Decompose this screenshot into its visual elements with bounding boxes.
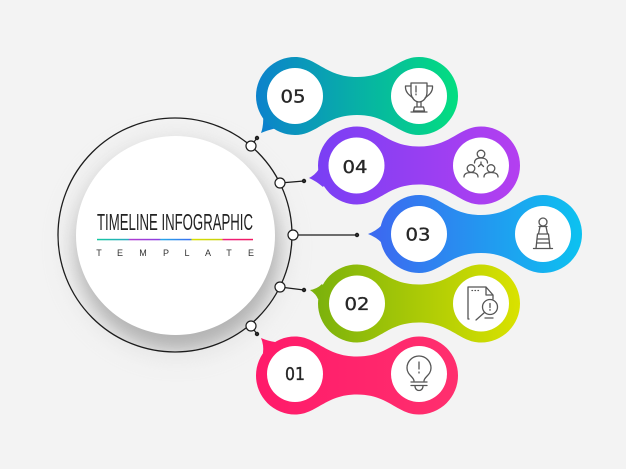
rainbow divider: [97, 239, 253, 240]
icon: light bulb: [407, 356, 431, 390]
icon: document with magnifier: [468, 287, 498, 320]
number 05: 05: [280, 86, 306, 108]
connector 05: [246, 136, 259, 151]
subtitle: E: [117, 248, 123, 258]
subtitle: P: [163, 248, 169, 258]
title block: [96, 209, 254, 258]
icon: trophy: [405, 83, 433, 112]
subtitle: A: [205, 248, 211, 258]
subtitle: [96, 248, 254, 258]
connector 04: [275, 178, 306, 188]
inner shadow of white disc: [78, 150, 278, 350]
pill 01: [256, 336, 458, 414]
icon: team: [464, 150, 498, 177]
white disc: [76, 136, 275, 335]
ring outline: [58, 118, 292, 352]
number 04: 04: [342, 157, 368, 178]
subtitle: T: [226, 248, 232, 258]
connector 01: [246, 321, 259, 336]
subtitle: M: [139, 248, 147, 258]
connectors: [246, 136, 359, 336]
pill 03: [368, 195, 582, 273]
connector 02: [275, 282, 306, 292]
title: TIMELINE INFOGRAPHIC: [97, 209, 253, 235]
outer disc shadow: [65, 134, 289, 358]
pill 04: [309, 126, 520, 204]
connector 03: [288, 230, 359, 240]
main circle: [58, 118, 292, 358]
icon: chess pawn: [534, 218, 552, 248]
subtitle: L: [184, 248, 190, 258]
subtitle: E: [248, 248, 254, 258]
pill 02: [310, 264, 520, 342]
subtitle: T: [96, 248, 102, 258]
infographic canvas: [57, 57, 582, 414]
pill 05: [256, 57, 458, 135]
number 03: 03: [406, 224, 430, 246]
number 02: 02: [344, 294, 370, 315]
number 01: 01: [285, 364, 305, 385]
